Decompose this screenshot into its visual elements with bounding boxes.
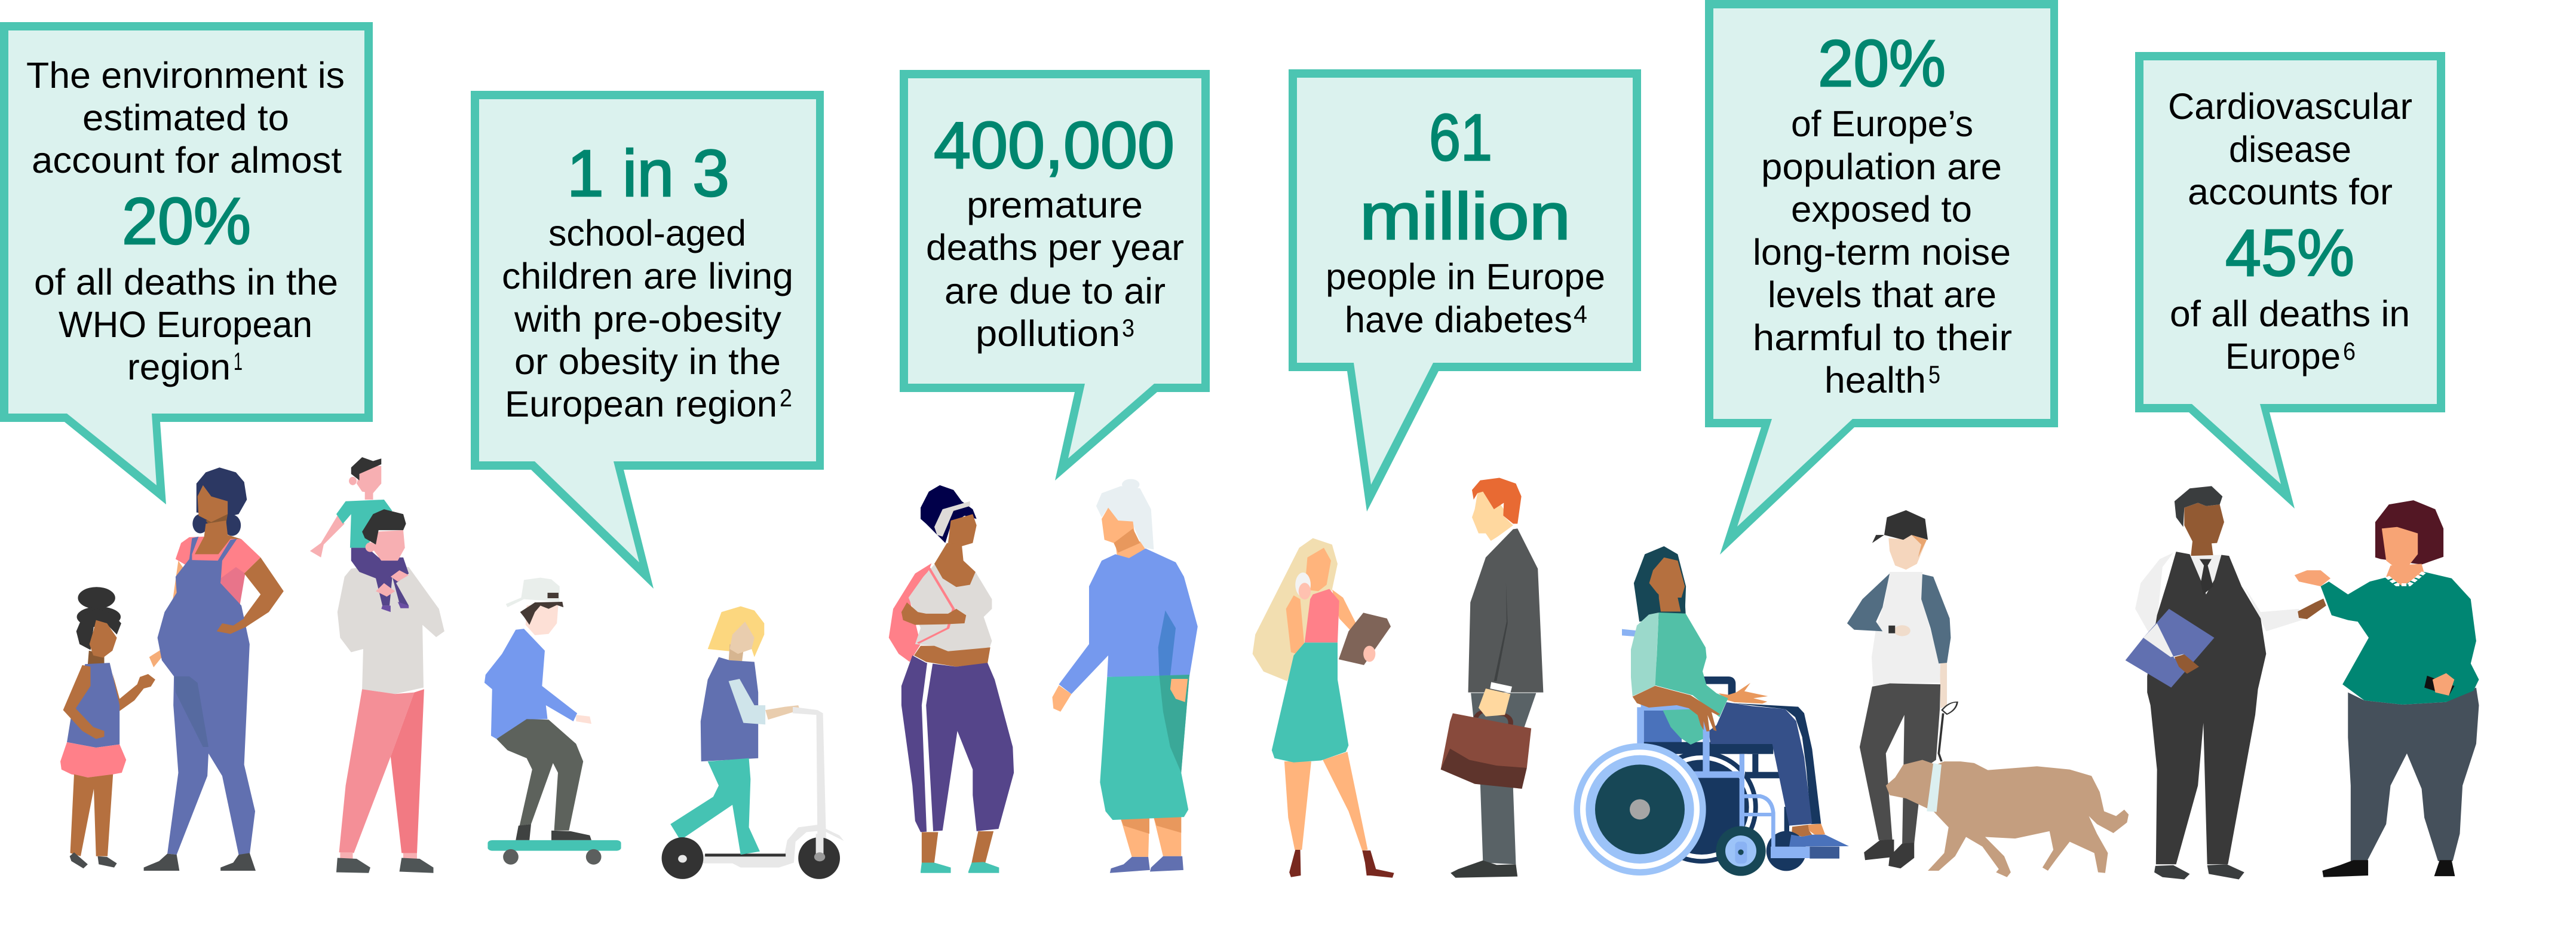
wheelchair rear frame — [1622, 629, 1789, 864]
people group: right section — [1847, 486, 2479, 879]
speech bubble 2: school-aged children: children are living — [502, 256, 793, 296]
speech bubble 2: school-aged children: with pre-obesity — [514, 299, 782, 339]
speech bubble 6: cardiovascular disease: Europe — [2225, 336, 2341, 376]
figure: man with child on shoulders — [310, 457, 444, 873]
speech bubble 2: school-aged children: school-aged — [548, 213, 746, 253]
seated legs and shoes — [1709, 702, 1825, 837]
speech bubble 4: diabetes — [1289, 69, 1641, 512]
speech bubble 3: air pollution: are due to air — [944, 271, 1166, 311]
speech bubble 2: school-aged children: European region — [505, 384, 777, 424]
figure: woman head and hair, wheelchair user — [1634, 546, 1686, 622]
speech bubble 4: diabetes: people in Europe — [1326, 256, 1605, 297]
speech bubble 4: diabetes: million — [1360, 180, 1571, 253]
figure: blonde woman with phone and tablet — [1253, 538, 1394, 878]
speech bubble 6: cardiovascular disease: 6 — [2343, 337, 2356, 365]
speech bubble 5: noise: exposed to — [1791, 189, 1972, 229]
torso, arm and hand — [1631, 598, 1768, 745]
speech bubble 5: noise: health — [1824, 360, 1926, 400]
speech bubble 3: air pollution: premature — [967, 185, 1143, 225]
speech bubble 6: cardiovascular disease: disease — [2229, 129, 2351, 170]
speech bubble 5: noise: population are — [1761, 146, 2002, 187]
speech bubble 5: noise: levels that are — [1768, 274, 1997, 315]
speech bubble 1: environment deaths — [0, 22, 373, 504]
speech bubble 1: environment deaths: region — [127, 347, 231, 387]
speech bubble 3: air pollution: deaths per year — [926, 227, 1184, 268]
figure: woman in green sweater — [2295, 500, 2479, 877]
figure: woman with pink bag — [889, 485, 1014, 873]
speech bubble 1: environment deaths: 20% — [122, 185, 251, 258]
people group: middle section — [889, 477, 1686, 878]
figure: businessman with briefcase — [1441, 477, 1543, 878]
figure: girl — [60, 587, 155, 868]
speech bubble 5: noise: harmful to their — [1753, 317, 2012, 358]
speech bubble 4: diabetes: 4 — [1574, 300, 1587, 328]
speech bubble 1: environment deaths: estimated to — [82, 97, 289, 138]
speech bubble 6: cardiovascular disease — [2135, 52, 2445, 509]
speech bubble 2: school-aged children: 1 in 3 — [567, 137, 729, 210]
speech bubble 2: school-aged children: 2 — [780, 384, 792, 412]
speech bubble 3: air pollution: 400,000 — [934, 109, 1174, 182]
speech bubble 5: noise: 5 — [1928, 360, 1940, 388]
speech bubble 2: school-aged children — [471, 91, 824, 589]
speech bubble 1: environment deaths: WHO European — [59, 304, 312, 345]
figure: person with guide dog — [1847, 510, 2129, 877]
figure: man in waistcoat with folder — [2126, 486, 2326, 879]
speech bubble 1: environment deaths: 1 — [234, 347, 243, 375]
figure: skateboarder — [484, 578, 621, 865]
speech bubble 1: environment deaths: account for almost — [32, 140, 342, 180]
armrest and large wheel — [1574, 707, 1706, 876]
speech bubble 6: cardiovascular disease: accounts for — [2188, 172, 2393, 212]
speech bubble 6: cardiovascular disease: 45% — [2225, 216, 2354, 290]
speech bubble 5: noise: of Europe’s — [1791, 103, 1973, 144]
speech bubble 5: noise — [1705, 0, 2058, 555]
speech bubble 1: environment deaths: The environment is — [26, 55, 345, 96]
figure: older woman — [1052, 479, 1198, 873]
speech bubble 4: diabetes: 61 — [1429, 101, 1492, 175]
speech bubble 6: cardiovascular disease: of all deaths in — [2170, 293, 2410, 334]
figure: pregnant woman — [144, 467, 284, 871]
speech bubble 1: environment deaths: of all deaths in the — [34, 262, 338, 302]
speech bubble 6: cardiovascular disease: Cardiovascular — [2168, 86, 2412, 127]
front frame and small wheels — [1680, 754, 1849, 876]
speech bubble 3: air pollution — [900, 70, 1210, 480]
speech bubble 5: noise: long-term noise — [1753, 232, 2011, 273]
speech bubble 2: school-aged children: or obesity in the — [514, 341, 781, 382]
speech bubble 4: diabetes: have diabetes — [1345, 299, 1572, 340]
figure: wheelchair and seated body — [1574, 598, 1849, 876]
speech bubble 3: air pollution: pollution — [976, 313, 1120, 354]
figure: girl on scooter — [662, 606, 844, 879]
speech bubble 3: air pollution: 3 — [1122, 314, 1134, 342]
speech bubble 5: noise: 20% — [1818, 27, 1946, 100]
people group: left section — [60, 457, 844, 879]
